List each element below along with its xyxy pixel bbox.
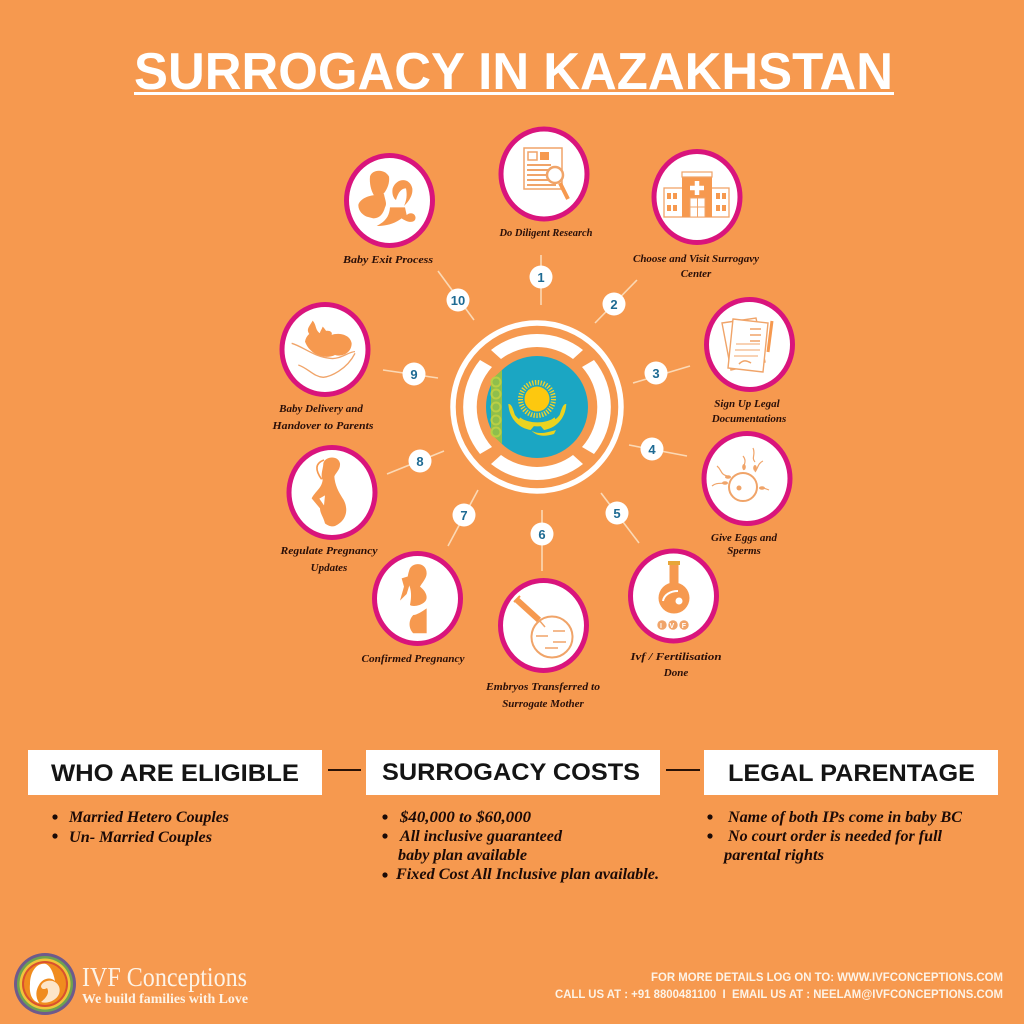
bullet list: Name of both IPs come in baby BC [727, 809, 962, 826]
connector 3: 3 [652, 366, 660, 381]
bottom ring segment [491, 455, 583, 480]
connector 9 [383, 362, 438, 386]
label: Baby Delivery and [278, 403, 363, 415]
icon: syringe and dish [514, 596, 572, 658]
step 4: eggs and sperms: Sperms [727, 545, 761, 557]
connector 4 [629, 438, 687, 460]
flag sun rays [520, 382, 554, 416]
bullet list: All inclusive guaranteed [399, 828, 563, 845]
panel: legal parentage [704, 750, 998, 864]
connector line [328, 769, 361, 771]
step 3: legal documents: Documentations [711, 413, 786, 425]
central flag emblem [453, 323, 621, 491]
heading box [28, 750, 322, 795]
heading box: SURROGACY COSTS [382, 759, 640, 786]
flag disc [486, 356, 588, 458]
connector 10 [438, 271, 474, 320]
connector 7: 7 [460, 508, 468, 523]
icon: hospital [664, 172, 729, 217]
left ring segment [463, 360, 492, 454]
flag ornament [491, 370, 502, 444]
step 5: IVF flask: Done [663, 667, 688, 679]
connector 1 [530, 255, 552, 305]
flag eagle [508, 404, 566, 436]
step 10: baby exit [342, 156, 433, 266]
step 7: confirmed pregnancy [362, 554, 465, 665]
top ring segment [491, 334, 583, 359]
heading box: LEGAL PARENTAGE [728, 760, 975, 787]
connector 7 [448, 490, 478, 546]
step 2: center [633, 152, 759, 280]
connector 3 [633, 362, 690, 384]
step 6: embryo transfer [485, 580, 601, 710]
label: Choose and Visit Surrogavy [633, 253, 759, 265]
heading box: WHO ARE ELIGIBLE [51, 760, 299, 787]
step 2: center: Center [681, 268, 712, 280]
panel: surrogacy costs [366, 750, 660, 883]
icon: baby on hand [292, 321, 355, 377]
connector 6 [530, 510, 554, 571]
label: Embryos Transferred to [485, 681, 601, 693]
icon: pregnant torso [400, 564, 427, 633]
icon: papers and pen [722, 318, 772, 372]
connector 1: 1 [537, 270, 545, 285]
step 8: pregnancy updates: Updates [311, 562, 347, 574]
icon: parents and baby [358, 171, 416, 226]
bullet list: parental rights [722, 847, 824, 864]
connector 2 [595, 280, 637, 323]
step 9: baby delivery [271, 304, 374, 432]
flag sun [524, 386, 550, 412]
bullet list [52, 809, 229, 846]
step 6: embryo transfer: Surrogate Mother [502, 698, 585, 710]
connector 4: 4 [648, 442, 656, 457]
bullet list [707, 809, 962, 864]
connector 9: 9 [410, 367, 418, 382]
right ring segment [582, 360, 611, 454]
connector line [666, 769, 700, 771]
tagline: We build families with Love [82, 991, 248, 1006]
title: SURROGACY IN KAZAKHSTAN [134, 43, 893, 101]
icon: flask: I V F [660, 623, 687, 630]
heading box [704, 750, 998, 795]
icon: pregnant silhouette [312, 457, 346, 526]
logo mark [14, 953, 76, 1015]
connector 5 [601, 493, 639, 543]
bullet list: No court order is needed for full [727, 828, 943, 845]
label: Do Diligent Research [499, 227, 592, 239]
label: Sign Up Legal [714, 398, 781, 410]
icon: egg and sperm [712, 448, 769, 501]
bullet list: Un- Married Couples [69, 829, 212, 846]
panel: who are eligible [28, 750, 322, 846]
connector 8 [387, 450, 444, 474]
connector 5: 5 [613, 506, 621, 521]
heading box [366, 750, 660, 795]
connector 10: 10 [451, 293, 465, 308]
label: Baby Exit Process [342, 254, 433, 266]
bullet list: $40,000 to $60,000 [399, 809, 531, 826]
label: Ivf / Fertilisation [629, 651, 722, 663]
bullet list: baby plan available [398, 847, 527, 864]
footer contact details [555, 972, 1003, 1001]
logo: IVF Conceptions [14, 953, 248, 1015]
step 9: baby delivery: Handover to Parents [271, 420, 374, 432]
step 1: research [499, 129, 592, 239]
step 5: IVF flask [629, 551, 722, 679]
step 4: eggs and sperms [704, 434, 790, 557]
connector 8: 8 [416, 454, 424, 469]
connector 2: 2 [610, 297, 618, 312]
bullet list [382, 809, 659, 883]
step 3: legal documents [706, 300, 792, 425]
icon: document and magnifier [524, 148, 568, 199]
step 8: pregnancy updates [279, 448, 378, 574]
connector 6: 6 [538, 527, 546, 542]
label: Confirmed Pregnancy [362, 653, 465, 665]
footer contact details: CALL US AT : +91 8800481100 I EMAIL US AT : NEELAM@IVFCONCEPTIONS.COM [555, 989, 1003, 1001]
brand name: IVF Conceptions [82, 962, 247, 992]
bullet list: Fixed Cost All Inclusive plan available. [395, 866, 659, 883]
footer contact details: FOR MORE DETAILS LOG ON TO: WWW.IVFCONCEPTIONS.COM [651, 972, 1003, 984]
label: Give Eggs and [711, 532, 778, 544]
bullet list: Married Hetero Couples [68, 809, 229, 826]
label: Regulate Pregnancy [279, 545, 378, 557]
